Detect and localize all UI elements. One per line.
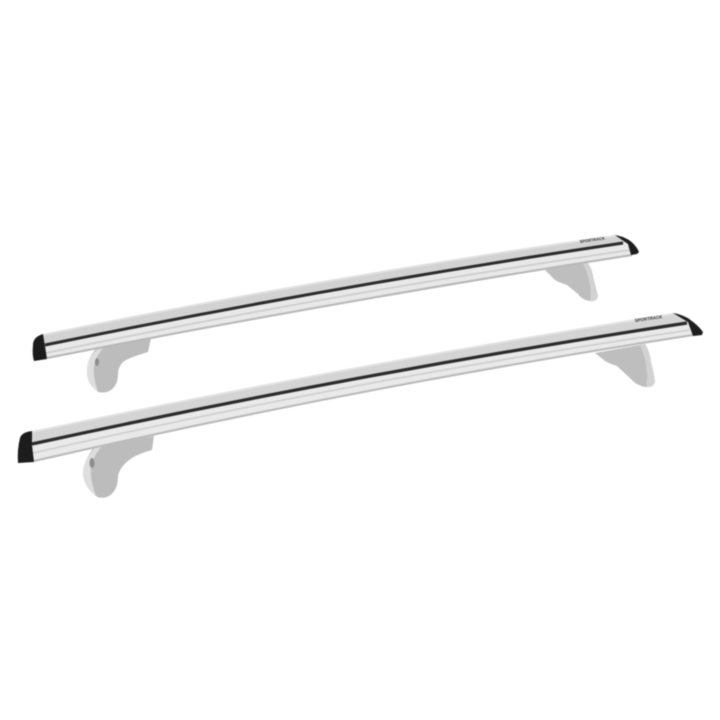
brand label: SPORTRACK bbox=[634, 314, 663, 323]
rubber stripe bbox=[32, 323, 687, 444]
foot: lower bar right bbox=[595, 344, 655, 387]
foot: upper bar right bbox=[545, 262, 598, 301]
rubber stripe bbox=[45, 243, 623, 345]
lower crossbar bbox=[18, 313, 703, 463]
brand label: SPORTRACK bbox=[579, 235, 605, 244]
bar body: lower face bbox=[45, 241, 632, 359]
right end cap bbox=[615, 235, 639, 255]
upper crossbar bbox=[33, 235, 639, 361]
left end cap bbox=[33, 334, 47, 361]
left end cap bbox=[18, 431, 34, 463]
bar body: lower face bbox=[32, 318, 693, 462]
foot: lower bar left bbox=[83, 436, 154, 498]
bar body: upper face bbox=[43, 235, 630, 345]
bar body: upper face bbox=[32, 313, 690, 444]
right end cap bbox=[673, 313, 703, 336]
foot: upper bar left bbox=[87, 338, 151, 392]
